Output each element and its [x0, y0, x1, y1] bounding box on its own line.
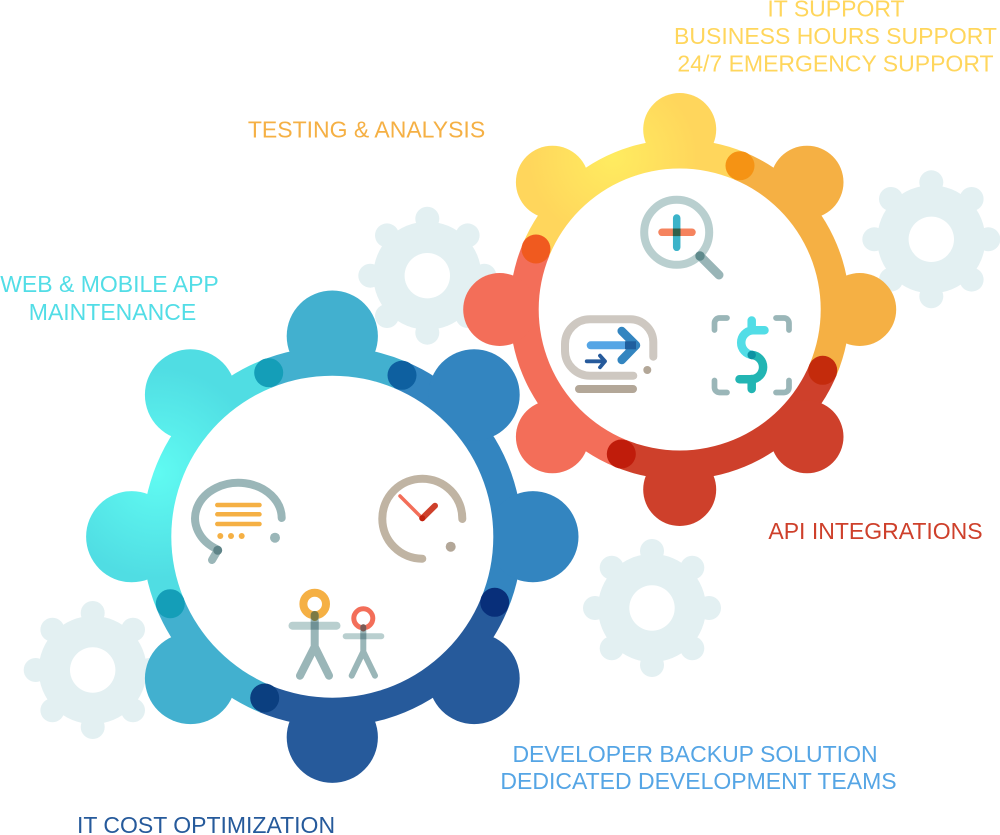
segment: lower left lobe: [145, 537, 332, 724]
label: web and mobile app maintenance: [0, 271, 219, 325]
label: developer backup and dedicated teams: DEDICATED DEVELOPMENT TEAMS: [500, 768, 897, 794]
small orange and red gear: [463, 93, 896, 526]
segment: top lobe: [260, 290, 405, 537]
background gear: centre: [358, 207, 496, 345]
label: web and mobile app maintenance: MAINTENANCE: [29, 299, 196, 325]
segment: orange testing: [680, 146, 896, 375]
background gear: lower left: [24, 601, 162, 739]
inner white disc: [539, 168, 821, 450]
label: testing and analysis: TESTING & ANALYSIS: [248, 116, 485, 142]
icon: two people: [292, 593, 381, 676]
segment: yellow IT support: [516, 93, 745, 310]
segment: IT cost optimization: [260, 537, 520, 783]
segment: red API integrations: [615, 310, 844, 526]
label: IT support: [674, 0, 997, 77]
icon: speech bubble: [195, 483, 282, 560]
label: IT support: 24/7 EMERGENCY SUPPORT: [677, 51, 994, 77]
joint dots: [522, 151, 837, 468]
segment: web and mobile app maintenance: [86, 349, 332, 609]
background gear: lower middle: [583, 539, 721, 677]
person: small: [346, 609, 381, 676]
label: API integrations: API INTEGRATIONS: [768, 518, 983, 544]
icon: magnifier: [644, 200, 719, 275]
icon: monitor with arrows: [565, 319, 653, 389]
label: web and mobile app maintenance: WEB & MOBILE APP: [0, 271, 219, 297]
background gear: top right: [862, 170, 1000, 308]
segment: developer backup: [332, 349, 578, 609]
person: large: [292, 593, 336, 676]
large blue gear: [86, 290, 578, 783]
segment: salmon: [463, 244, 680, 473]
label: developer backup and dedicated teams: [500, 741, 897, 794]
label: developer backup and dedicated teams: DEVELOPER BACKUP SOLUTION: [512, 741, 878, 767]
inner white disc: [171, 376, 493, 698]
label: IT support: BUSINESS HOURS SUPPORT: [674, 23, 997, 49]
icon: dollar in brackets: [714, 318, 789, 392]
joint dots: [156, 358, 509, 712]
icon: clock: [382, 479, 462, 559]
